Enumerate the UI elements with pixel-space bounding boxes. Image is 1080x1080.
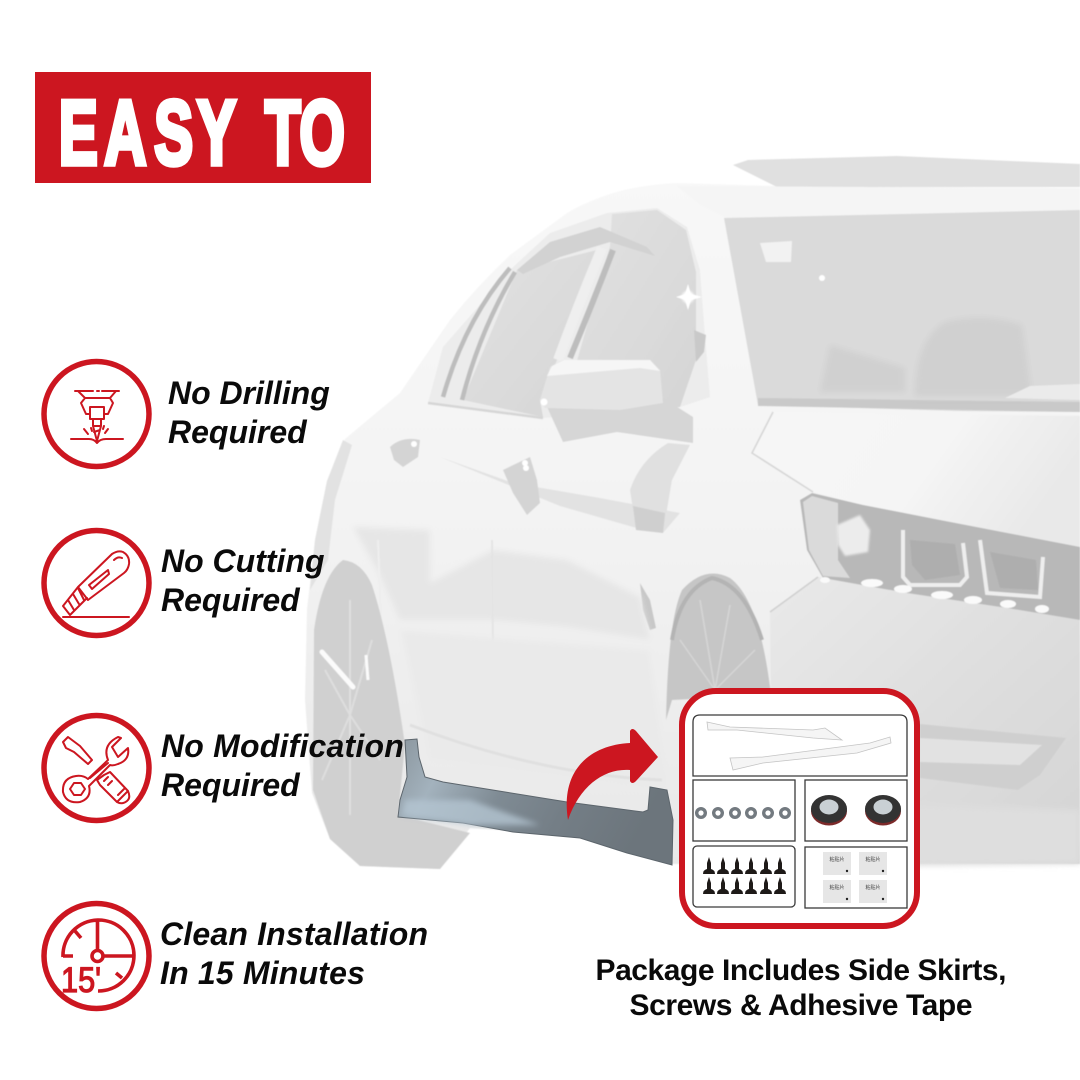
title text: EASY [59,83,236,184]
roof panel [677,186,1080,219]
title text [59,83,345,184]
icon: drill [44,362,149,466]
hood [752,412,1080,547]
cell: screws [693,846,795,907]
cell: adhesive pads: 粘贴片 [829,884,845,891]
feature: no drilling [44,362,330,466]
label: No Modification [161,728,404,764]
front bumper [770,577,1080,866]
front door window [570,210,696,410]
door handle front [503,457,540,515]
title text: TO [265,83,345,184]
icon: wrench and screwdriver [44,716,149,820]
label: No Drilling [168,375,330,411]
sill line [428,403,543,418]
red arrow [567,729,658,820]
cell: adhesive pads: 粘贴片 [865,884,881,891]
window frame area [428,208,710,418]
feature: clean installation [44,904,428,1008]
car body [305,183,1080,869]
door reflection band [440,443,690,630]
icon: 15 minute clock: 15' [61,961,101,1000]
hood edge line [752,412,813,492]
package caption: Package Includes Side Skirts, [596,954,1006,987]
mirror shadow [543,398,693,443]
sunroof [733,156,1080,187]
mirror [540,360,663,410]
sparkle [676,284,702,310]
highlighted side skirt [398,739,673,865]
label: Required [168,414,308,450]
label: In 15 Minutes [160,955,365,991]
front wheel [666,574,771,720]
panel: package contents [682,691,917,926]
rear wheel [313,560,470,869]
rain visor [517,227,655,274]
package caption: Screws & Adhesive Tape [630,989,972,1022]
label: Required [161,582,301,618]
title banner [35,72,371,184]
icon: 15 minute clock [44,904,149,1008]
label: Required [161,767,301,803]
cell: adhesive tape rolls [805,780,907,841]
windshield [724,210,1080,412]
label: No Cutting [161,543,324,579]
icon: cutter knife [44,530,149,636]
rear door window [463,250,597,417]
label: Clean Installation [160,916,428,952]
door reflections [353,527,668,790]
cell: washers [693,780,795,841]
door handle rear [390,439,420,467]
car photo, faded [305,156,1080,869]
feature: no cutting [44,530,324,636]
mirror bracket [694,330,706,362]
cell: adhesive pads: 粘贴片 [865,856,881,863]
headlight [800,493,1080,620]
cell: adhesive pads [805,847,907,908]
rear panel sliver [310,440,352,590]
feature: no modification [44,716,404,820]
cell: adhesive pads: 粘贴片 [829,856,845,863]
door frame strips [443,248,613,400]
cell: side skirts [693,715,907,776]
